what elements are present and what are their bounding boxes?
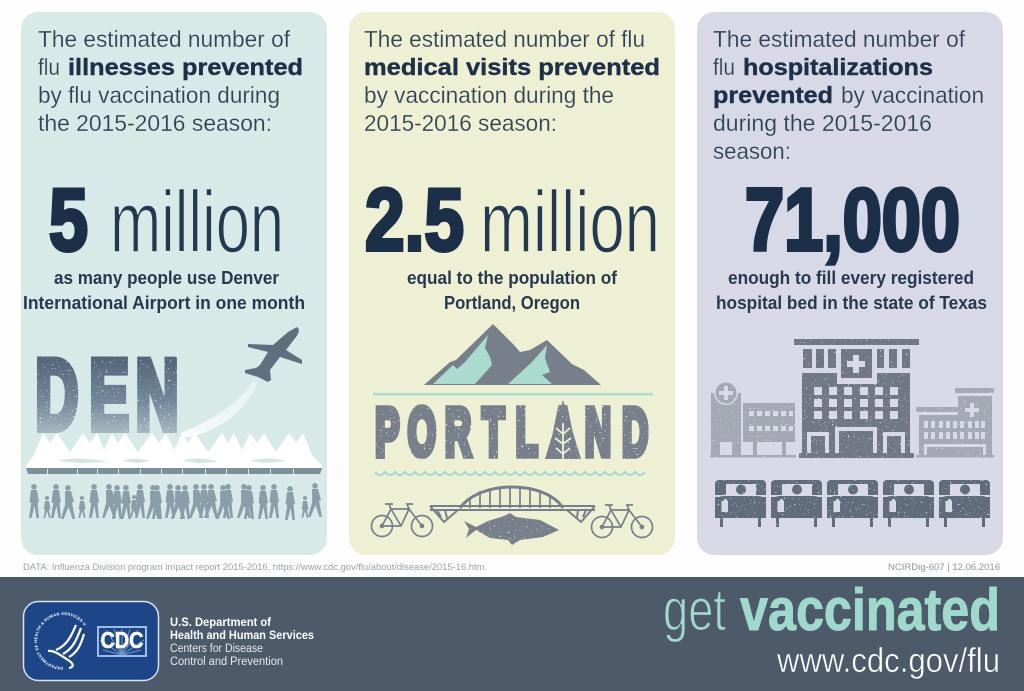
icon: left bicycle — [372, 504, 432, 536]
icon: airplane — [245, 327, 302, 382]
comparison text: Portland population — [407, 268, 618, 313]
icon: right bicycle — [592, 505, 652, 538]
comparison text: Portland population: Portland, Oregon — [444, 293, 580, 313]
heading: illnesses prevented: by flu vaccination during — [38, 82, 280, 108]
statistic: 2.5 million: 2.5 — [365, 170, 464, 269]
heading: hospitalizations prevented: by vaccination — [841, 82, 984, 108]
comparison text: Texas hospital beds: enough to fill every registered — [728, 268, 974, 288]
illustration: PORTLAND lettering: PORTLAND — [375, 395, 648, 470]
statistic: 2.5 million: million — [480, 174, 660, 271]
comparison text: airport: as many people use Denver — [54, 268, 279, 288]
logo: HHS eagle — [48, 625, 84, 668]
statistic: 71,000: 71,000 — [745, 170, 960, 269]
icon: fish — [464, 513, 559, 545]
icon row: hospital beds — [715, 480, 990, 527]
icon: tree in letter A — [555, 423, 571, 459]
illustration: left clinic — [710, 381, 796, 458]
heading: hospitalizations prevented: prevented — [713, 82, 833, 108]
illustration: mountains — [424, 324, 601, 385]
heading: medical visits prevented — [364, 26, 660, 136]
heading: medical visits prevented: medical visits prevented — [364, 54, 660, 80]
illustration: crowd of travellers — [29, 483, 322, 520]
heading: hospitalizations prevented: during the 2015-2016 — [713, 110, 932, 136]
comparison text: airport — [23, 268, 305, 313]
heading: hospitalizations prevented: season: — [713, 138, 791, 164]
agency name text: U.S. Department of — [170, 617, 271, 629]
heading: illnesses prevented: illnesses prevented — [68, 54, 303, 80]
statistic: 5 million — [49, 170, 284, 271]
comparison text: Texas hospital beds — [716, 268, 987, 313]
heading: illnesses prevented — [38, 26, 303, 136]
heading: medical visits prevented: by vaccination during the — [364, 82, 614, 108]
illustration: main hospital — [794, 339, 919, 458]
illustration: contrail — [180, 381, 257, 438]
document ID note: NCIRDig-607 | 12.06.2016 — [888, 562, 1000, 573]
heading: medical visits prevented: The estimated number of flu — [364, 26, 645, 52]
heading: illnesses prevented: flu — [38, 54, 60, 80]
agency name text: Health and Human Services — [170, 630, 314, 642]
data source note: DATA: Influenza Division program impact report 2015-2016, https://www.cdc.gov/flu/about/disease/2015-16.htm. — [23, 562, 487, 573]
agency name text: Control and Prevention — [170, 656, 283, 668]
comparison text: airport: International Airport in one month — [23, 293, 305, 313]
panel: hospitalizations prevented — [697, 12, 1003, 555]
heading: illnesses prevented: The estimated number of — [38, 26, 290, 52]
agency name text — [170, 617, 314, 668]
statistic: 5 million: million — [110, 174, 284, 271]
panel: illnesses prevented — [21, 12, 327, 555]
heading: hospitalizations prevented: flu — [713, 54, 735, 80]
divider line: teal — [373, 393, 653, 396]
logo: HHS and CDC badge — [22, 600, 160, 682]
illustration: airport tents — [26, 433, 322, 474]
logo: CDC box: CDC — [100, 627, 144, 653]
statistic: 5 million: 5 — [49, 170, 88, 269]
illustration: DEN letters: DEN — [35, 340, 178, 451]
website URL: www.cdc.gov/flu — [776, 642, 1000, 680]
heading: hospitalizations prevented: The estimated number of — [713, 26, 965, 52]
panel: medical visits prevented — [349, 12, 675, 555]
comparison text: Portland population: equal to the population of — [407, 268, 618, 288]
heading: hospitalizations prevented: hospitalizations — [743, 54, 933, 80]
statistic: 2.5 million — [365, 170, 660, 271]
logo: HHS seal ring text: DEPARTMENT OF HEALTH & HUMAN SERVICES USA — [34, 612, 86, 670]
illustration: water waves — [375, 472, 645, 475]
illustration: right clinic — [916, 388, 994, 458]
comparison text: Texas hospital beds: hospital bed in the state of Texas — [716, 293, 987, 313]
agency name text: Centers for Disease — [170, 643, 263, 655]
heading: medical visits prevented: 2015-2016 season: — [364, 110, 557, 136]
illustration: bridge — [430, 487, 595, 522]
heading: illnesses prevented: the 2015-2016 season: — [38, 110, 272, 136]
call to action: get vaccinated: get — [663, 577, 726, 643]
heading: hospitalizations prevented — [713, 26, 984, 164]
